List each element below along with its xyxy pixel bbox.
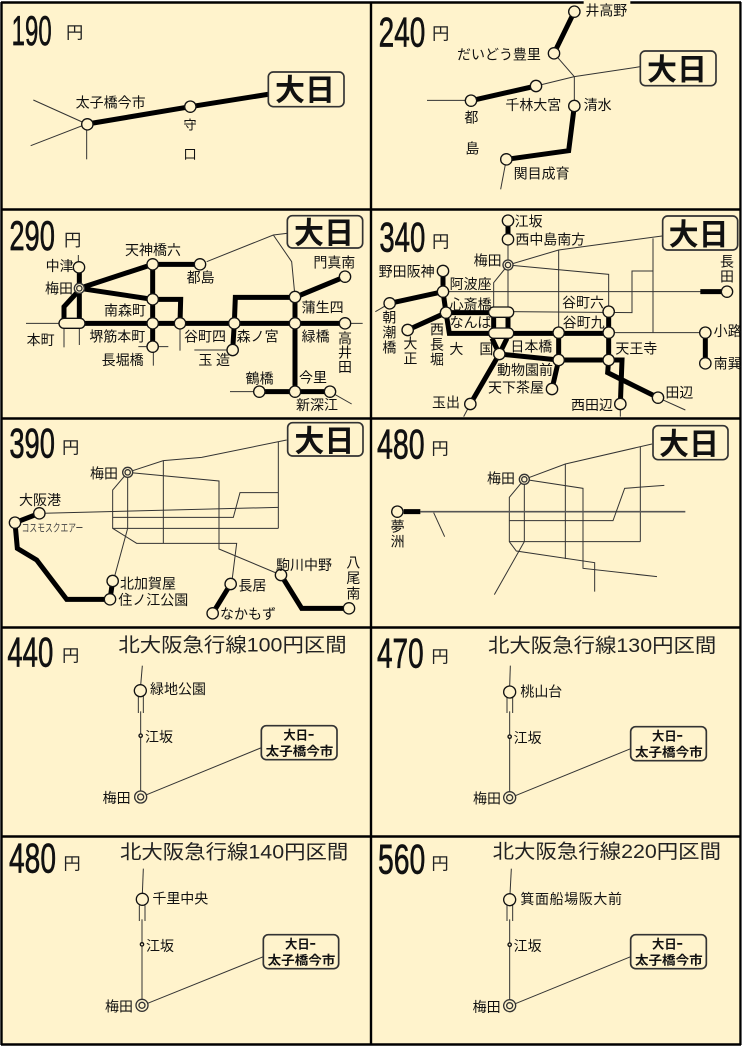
destination sign: 太子橋今市 xyxy=(266,744,333,759)
station labels: 梅田 xyxy=(487,470,515,486)
station labels: 江坂 xyxy=(146,938,174,954)
station labels: 北加賀屋 xyxy=(120,575,176,591)
price: 480 yen: 480 xyxy=(377,420,425,467)
station labels: 心斎橋 xyxy=(450,296,492,312)
station labels: だいどう豊里 xyxy=(457,46,541,62)
station labels: 中津 xyxy=(46,258,74,274)
station labels: 梅田 xyxy=(105,999,133,1015)
station labels: 田 xyxy=(720,269,734,285)
price: 390 yen: 390 xyxy=(9,419,55,466)
price: 470 yen: 470 xyxy=(377,630,424,677)
thick routes xyxy=(471,12,574,159)
station labels: 住ノ江公園 xyxy=(118,592,188,608)
panel: 340 yen xyxy=(375,213,742,417)
Umeda interchange xyxy=(123,467,133,477)
panel: 560 yen Kita-Osaka xyxy=(378,835,721,1015)
thick route xyxy=(404,504,420,519)
thick routes xyxy=(64,264,345,392)
destination sign: 大日: 大日 xyxy=(294,425,354,458)
station labels: 玉 xyxy=(198,352,212,368)
destination sign: 大日: 大日 xyxy=(659,429,719,462)
panel: 290 yen xyxy=(9,212,363,413)
destination sign: 大日ｰ xyxy=(652,937,683,952)
station labels: 都島 xyxy=(187,270,215,286)
price: 290 yen: 290 xyxy=(9,212,55,259)
station labels: 太子橋今市 xyxy=(76,94,146,110)
station labels xyxy=(473,891,622,1015)
destination sign: 大日: 大日 xyxy=(275,75,335,108)
station: Yumeshima xyxy=(392,506,403,517)
station labels: 桃山台 xyxy=(520,683,562,699)
station labels: 今里 xyxy=(299,370,327,386)
panel: 240 yen xyxy=(379,0,716,189)
station labels: 長堀橋 xyxy=(102,352,144,368)
stations xyxy=(504,686,516,738)
thick route xyxy=(87,94,270,124)
station labels: 西 xyxy=(430,321,444,337)
station labels: 正 xyxy=(403,350,417,366)
station labels: 大 xyxy=(403,335,417,351)
station labels: 関目成育 xyxy=(514,165,570,181)
station labels: 谷町六 xyxy=(562,294,604,310)
price: 480 yen: 480 xyxy=(9,835,56,882)
route lines xyxy=(420,444,685,595)
station labels: 洲 xyxy=(391,534,405,550)
price: 440 yen: 円 xyxy=(62,645,79,665)
station labels: 谷町四 xyxy=(184,329,226,345)
station labels: 都 xyxy=(464,110,478,126)
station labels: 造 xyxy=(216,352,230,368)
route lines xyxy=(427,53,640,189)
station labels: 井高野 xyxy=(585,3,627,19)
station labels: 島 xyxy=(465,140,479,156)
price: 240 yen: 円 xyxy=(432,23,449,43)
station labels: 江坂 xyxy=(514,938,542,954)
station labels: 梅田 xyxy=(473,791,501,807)
station labels: 梅田 xyxy=(45,280,73,296)
station labels: 南森町 xyxy=(104,302,146,318)
thick routes xyxy=(390,221,727,404)
stations xyxy=(504,894,516,946)
station labels: 天王寺 xyxy=(615,340,657,356)
station labels: 尾 xyxy=(346,570,360,586)
price: 480 yen: 円 xyxy=(63,853,81,873)
station labels: 緑地公園 xyxy=(150,681,206,697)
station labels xyxy=(457,3,627,181)
stations xyxy=(82,101,196,130)
heading: 北大阪急行線130円区間 xyxy=(488,635,716,657)
Umeda interchange xyxy=(504,1000,516,1012)
destination sign: 大日: 大日 xyxy=(647,54,707,87)
station labels: 千里中央 xyxy=(152,890,208,906)
destination sign: 大日ｰ xyxy=(652,729,683,744)
station labels: 南巽 xyxy=(714,355,742,371)
price: 470 yen: 円 xyxy=(431,646,449,666)
panel: 480 yen Yumeshima xyxy=(377,420,728,595)
station labels xyxy=(379,214,742,413)
station labels xyxy=(391,470,515,550)
stations xyxy=(136,893,148,946)
station labels: 谷町九 xyxy=(563,314,605,330)
station labels: 口 xyxy=(183,147,197,162)
destination sign xyxy=(263,935,339,969)
station labels: 阿波座 xyxy=(450,276,492,292)
station labels: 新深江 xyxy=(296,397,338,413)
destination sign: 大日ｰ xyxy=(283,728,314,743)
station labels: 森ノ宮 xyxy=(237,329,279,345)
station labels: 長居 xyxy=(238,578,266,594)
route lines xyxy=(139,869,263,1003)
station labels: 江坂 xyxy=(515,214,543,230)
Umeda interchange xyxy=(519,474,529,484)
Umeda interchange xyxy=(504,792,516,804)
route lines xyxy=(138,666,261,795)
station labels: 江坂 xyxy=(514,730,542,746)
station labels: 高 xyxy=(338,330,352,346)
station labels: 野田阪神 xyxy=(379,264,435,280)
panel: 470 yen Kita-Osaka xyxy=(377,630,716,807)
route lines xyxy=(39,440,287,583)
stations xyxy=(59,259,351,397)
station labels: 鶴橋 xyxy=(246,370,274,386)
station labels: 守 xyxy=(183,117,197,132)
station labels: 天神橋六 xyxy=(125,242,181,258)
heading: 北大阪急行線140円区間 xyxy=(120,842,348,864)
station labels: 天下茶屋 xyxy=(488,380,544,396)
station labels: 潮 xyxy=(382,325,396,341)
station labels: 井 xyxy=(338,345,352,361)
Umeda interchange xyxy=(136,999,148,1011)
heading: 北大阪急行線100円区間 xyxy=(118,634,347,656)
station labels xyxy=(473,683,562,807)
stations xyxy=(384,215,733,410)
station labels: 箕面船場阪大前 xyxy=(520,891,622,907)
station labels: 清水 xyxy=(584,97,612,113)
route lines xyxy=(31,100,87,159)
station labels: 梅田 xyxy=(90,465,118,481)
station labels: 門真南 xyxy=(313,254,355,270)
station labels xyxy=(105,890,208,1015)
destination sign xyxy=(631,935,706,969)
destination sign: 大日ｰ xyxy=(285,937,316,952)
price: 480 yen: 円 xyxy=(431,438,449,458)
stations xyxy=(465,6,580,165)
station labels: なかもず xyxy=(220,606,276,622)
panel: 480 yen Kita-Osaka xyxy=(9,835,348,1015)
destination sign: 太子橋今市 xyxy=(635,745,703,760)
station labels xyxy=(103,681,206,806)
station labels: 日本橋 xyxy=(510,338,552,354)
destination sign xyxy=(631,727,706,761)
station labels xyxy=(19,465,360,622)
station labels: 動物園前 xyxy=(497,362,553,378)
station labels: 南 xyxy=(346,585,360,601)
destination sign xyxy=(261,726,337,760)
panel: 390 yen xyxy=(9,419,363,622)
station labels: 堀 xyxy=(430,351,444,367)
station labels xyxy=(76,94,197,162)
station labels: 小路 xyxy=(714,323,742,339)
Umeda interchange xyxy=(503,260,513,270)
thick routes xyxy=(15,513,349,613)
stations xyxy=(134,685,146,737)
station labels: 梅田 xyxy=(473,999,501,1015)
label background notch xyxy=(584,0,630,7)
station labels: 朝 xyxy=(382,310,396,326)
station labels: 田辺 xyxy=(665,385,693,401)
station labels: 長 xyxy=(720,254,734,270)
station labels: 長 xyxy=(430,336,444,352)
price: 340 yen: 円 xyxy=(432,231,449,251)
route lines xyxy=(26,233,363,404)
station labels: 玉出 xyxy=(432,394,460,410)
price: 560 yen: 円 xyxy=(431,853,449,873)
destination sign: 大日: 大日 xyxy=(669,219,729,252)
route lines xyxy=(507,869,631,1004)
station labels: 堺筋本町 xyxy=(89,329,145,345)
panel: 190 yen xyxy=(12,7,344,162)
panel: 440 yen Kita-Osaka xyxy=(7,628,347,806)
station labels: 梅田 xyxy=(474,253,502,269)
station labels: 蒲生四 xyxy=(302,300,344,316)
station labels: 江坂 xyxy=(145,729,173,745)
price: 190 yen: 円 xyxy=(66,23,83,43)
station labels: 国 xyxy=(479,341,493,357)
route lines xyxy=(375,220,727,417)
heading: 北大阪急行線220円区間 xyxy=(493,841,721,863)
station labels: コスモスクエアー xyxy=(22,523,83,535)
destination sign: 太子橋今市 xyxy=(268,953,335,968)
station labels: 西田辺 xyxy=(571,397,613,413)
station labels: 駒川中野 xyxy=(276,557,332,573)
price: 340 yen: 340 xyxy=(379,213,425,260)
Umeda interchange xyxy=(74,283,84,293)
station labels xyxy=(27,242,355,413)
station labels: 梅田 xyxy=(103,790,131,806)
station labels: 大阪港 xyxy=(19,492,61,508)
station labels: 千林大宮 xyxy=(505,97,561,113)
station labels: 八 xyxy=(346,555,360,571)
station labels: 西中島南方 xyxy=(515,231,585,247)
station labels: 橋 xyxy=(382,340,396,356)
station labels: 夢 xyxy=(391,519,405,535)
price: 190 yen: 190 xyxy=(12,7,52,54)
station labels: 田 xyxy=(338,359,352,375)
stations xyxy=(9,508,355,619)
price: 240 yen: 240 xyxy=(379,9,425,56)
station labels: 大 xyxy=(449,341,463,357)
route lines xyxy=(507,666,631,796)
station labels: 本町 xyxy=(27,332,55,348)
station labels: なんば xyxy=(450,314,492,330)
destination sign: 太子橋今市 xyxy=(635,953,703,968)
price: 560 yen: 560 xyxy=(378,835,425,882)
destination sign: 大日: 大日 xyxy=(294,217,354,250)
price: 440 yen: 440 xyxy=(7,628,53,675)
Umeda interchange xyxy=(135,791,147,803)
price: 390 yen: 円 xyxy=(62,437,79,457)
price: 290 yen: 円 xyxy=(64,230,81,250)
station labels: 緑橋 xyxy=(302,329,330,345)
